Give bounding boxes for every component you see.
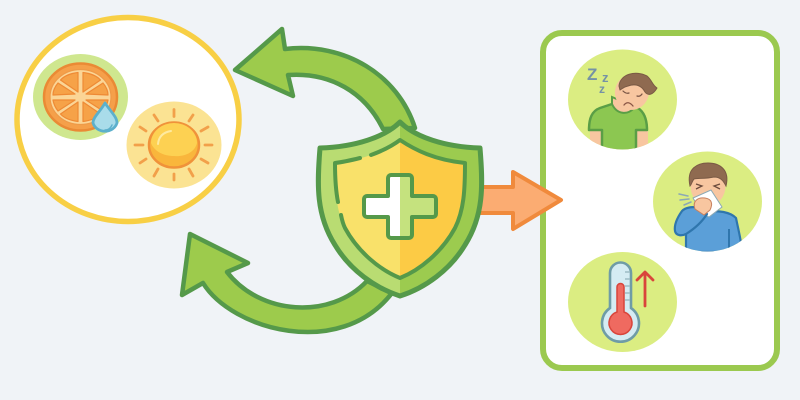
text: sleep zzz: Z <box>587 65 597 84</box>
icon: shield with cross <box>318 122 482 296</box>
icon: orange slice with water drop <box>33 54 128 140</box>
icon: sun <box>126 102 222 188</box>
panel: symptoms <box>543 33 777 368</box>
text: sleep zzz: z <box>599 82 605 96</box>
panel: causes circle <box>17 18 239 222</box>
arrow: orange arrow to symptoms <box>478 172 561 229</box>
icon: plus cross <box>364 175 436 238</box>
icon: thermometer with rising arrow <box>568 252 677 352</box>
arrow: bottom green curved arrow <box>182 234 392 332</box>
icon: tired person <box>568 50 677 160</box>
icon: sneezing person <box>653 152 762 252</box>
text: sleep zzz: z <box>602 70 609 85</box>
arrow: top green curved arrow <box>235 29 415 129</box>
text: sleep zzz <box>587 65 609 96</box>
